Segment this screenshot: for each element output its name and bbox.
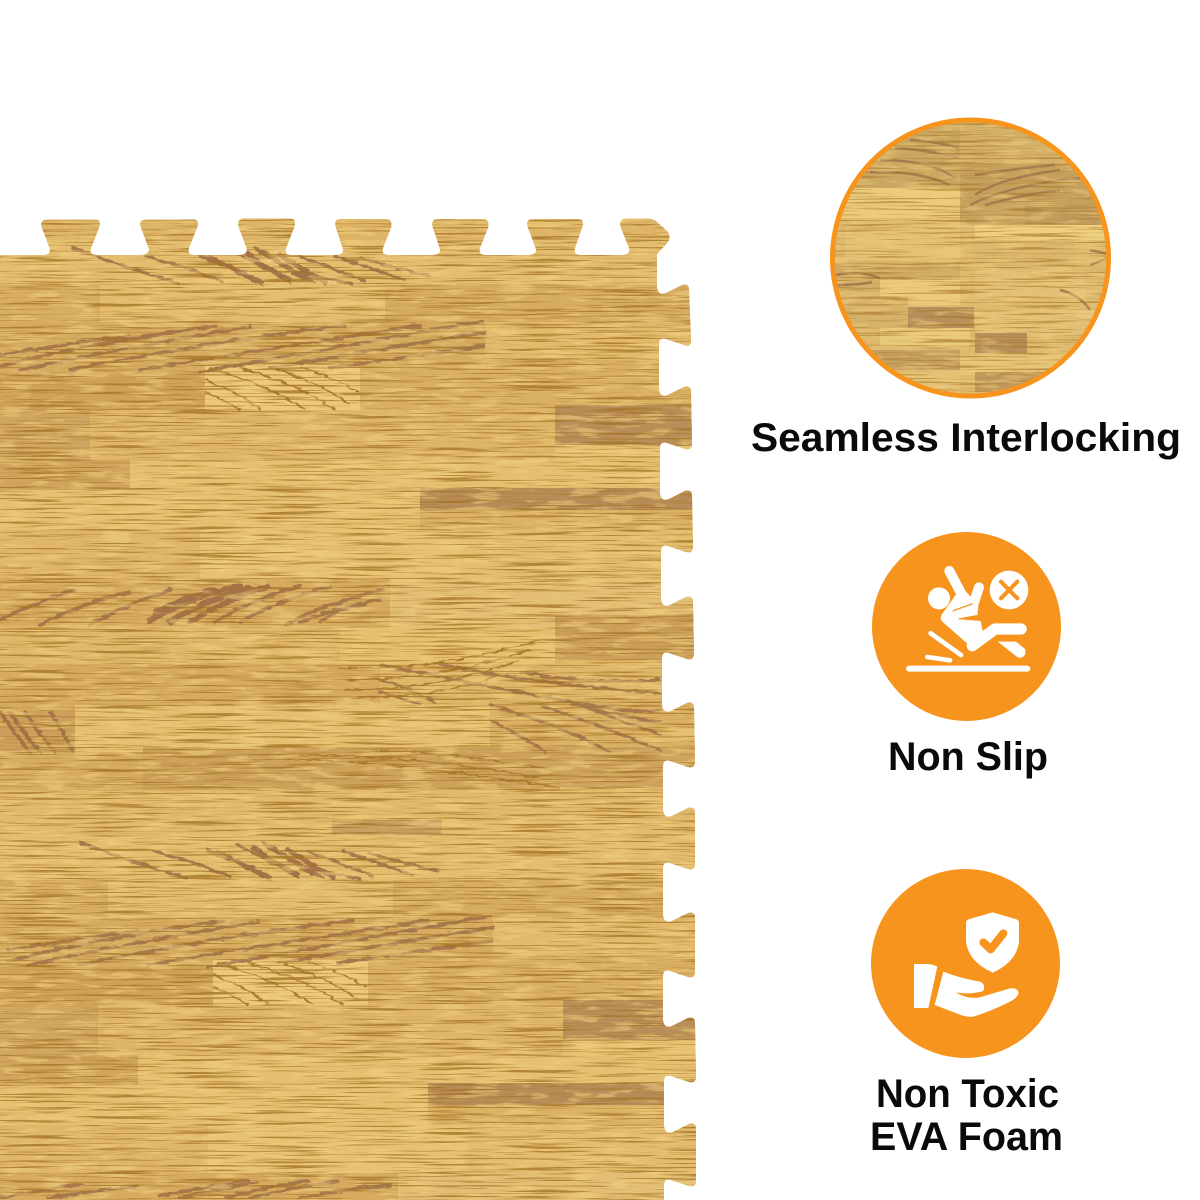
- panel: interlocking wood-grain foam mat: [0, 215, 728, 1200]
- label: non slip: Non Slip: [888, 735, 1048, 779]
- heading: seamless interlocking: Seamless Interlocking: [751, 416, 1181, 460]
- panel: seamless interlocking close-up: [830, 118, 1112, 400]
- icon: non toxic hand and shield: [871, 869, 1060, 1058]
- label: non toxic EVA foam: Non Toxic: [876, 1072, 1059, 1116]
- icon: non slip: [872, 532, 1061, 721]
- label: non toxic EVA foam: [870, 1072, 1063, 1159]
- label: non toxic EVA foam: EVA Foam: [870, 1115, 1063, 1159]
